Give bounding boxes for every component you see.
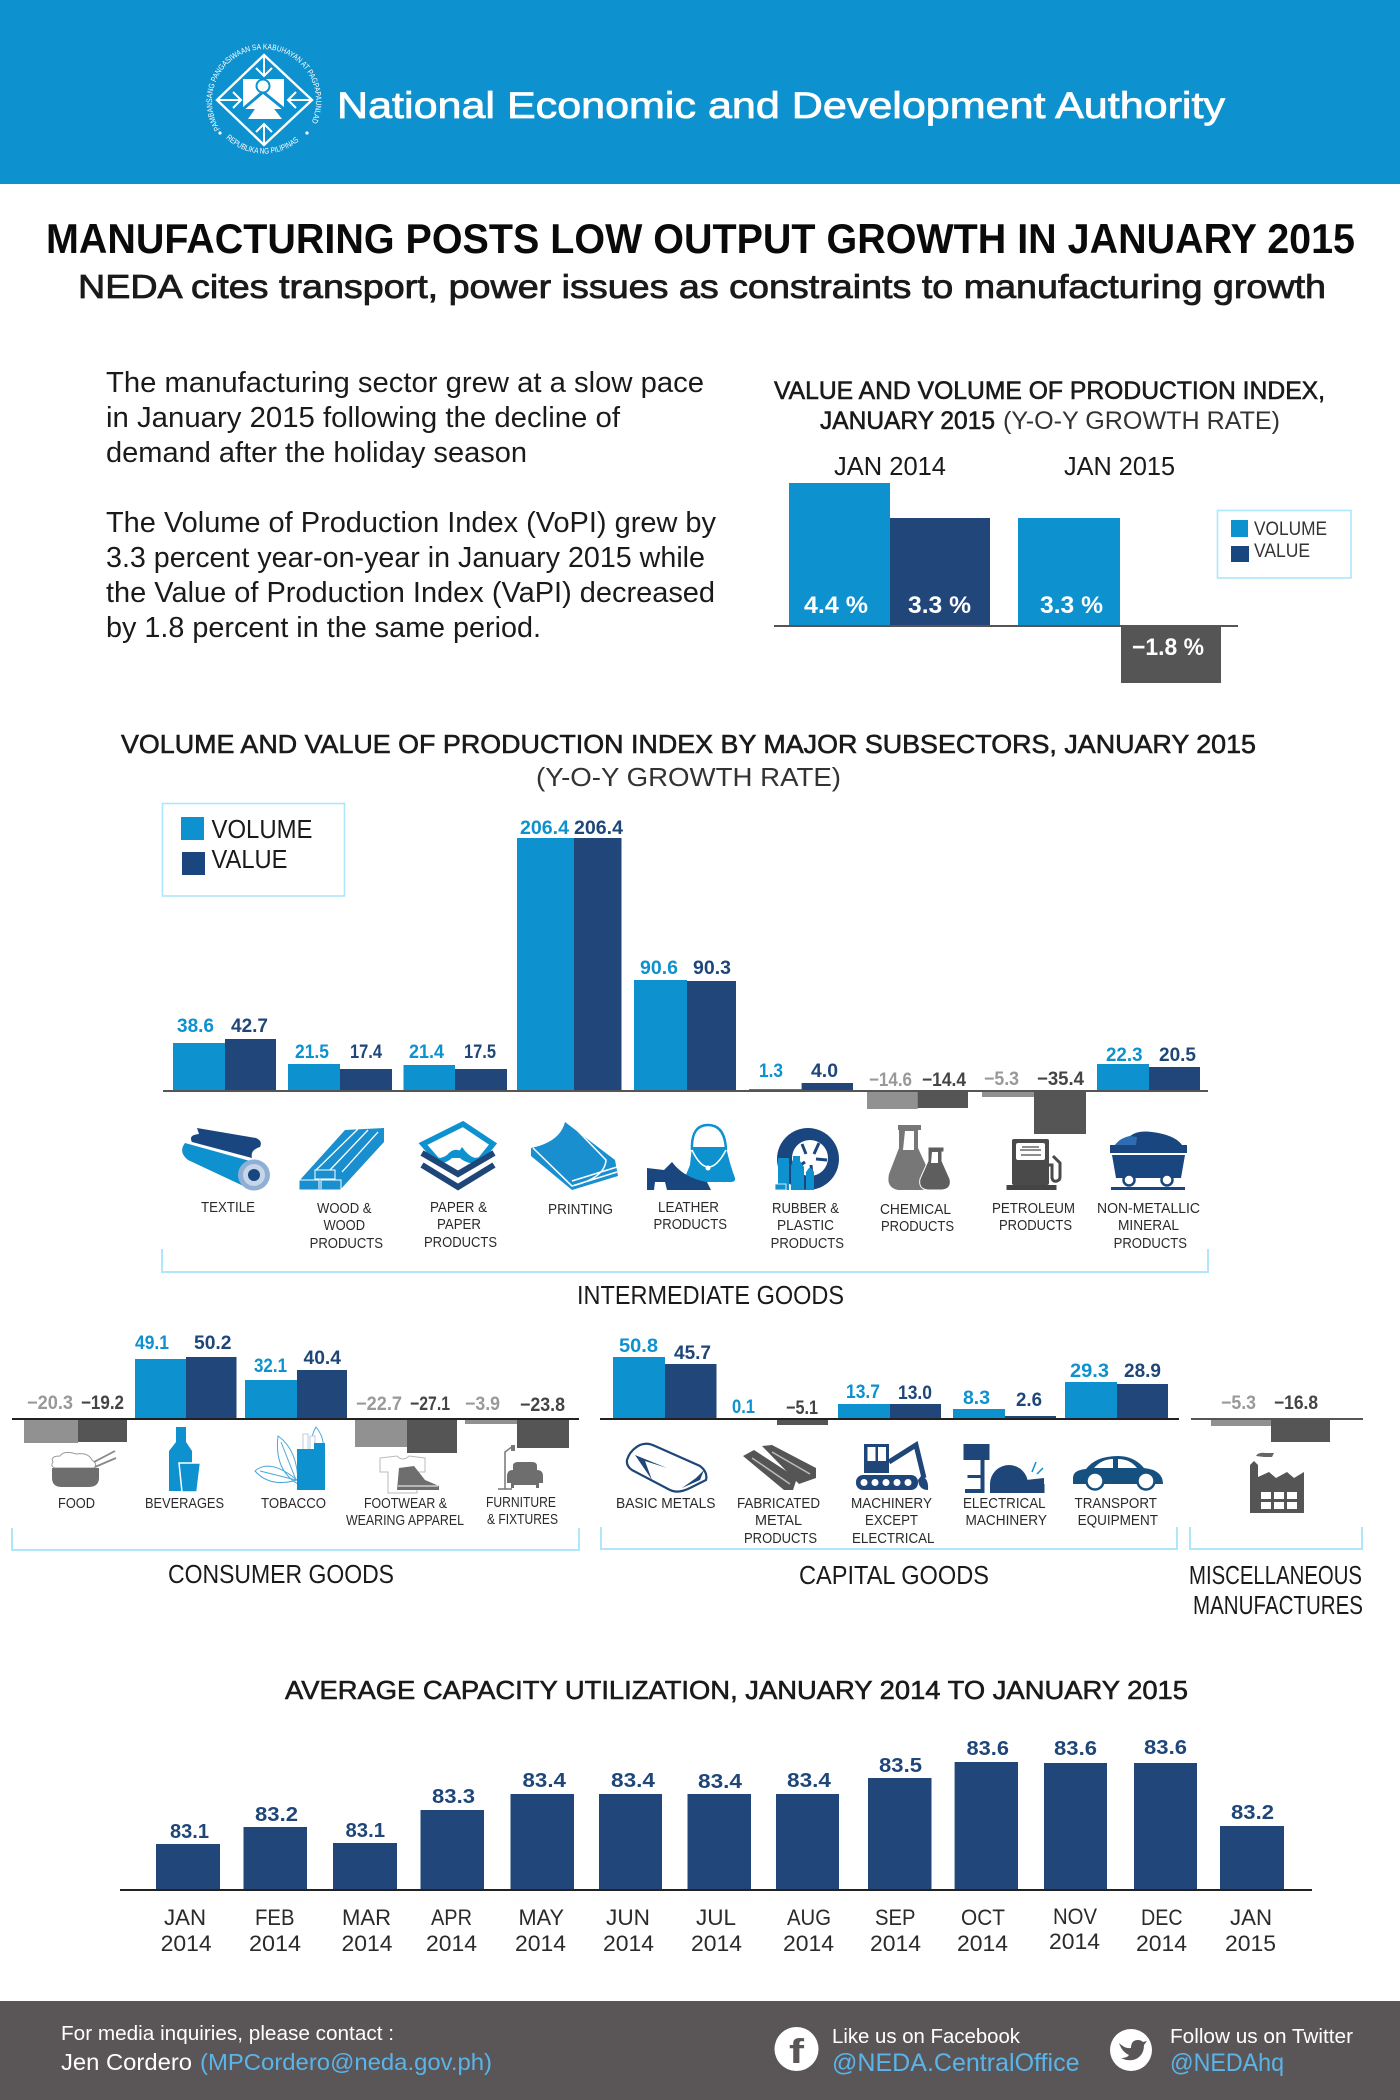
bracket: capital goods <box>601 1527 1177 1549</box>
bar chart: 3.3 % <box>1040 592 1103 619</box>
media contact: For media inquiries, please contact : <box>61 2023 394 2045</box>
icon: textile roll <box>182 1128 270 1190</box>
value labels: intermediate goods: 38.6 <box>177 1016 214 1037</box>
value labels: intermediate goods: −5.3 <box>984 1069 1019 1090</box>
subsector labels: TRANSPORT <box>1074 1495 1157 1512</box>
icon: mineral cart <box>1110 1132 1187 1190</box>
subsector labels <box>616 1495 1158 1547</box>
value labels: intermediate goods: −14.4 <box>922 1070 966 1091</box>
bar chart: intermediate goods <box>163 838 1208 1134</box>
title: MANUFACTURING POSTS LOW OUTPUT GROWTH IN JANUARY 2015 <box>46 215 1355 262</box>
group labels <box>834 451 1175 481</box>
chart heading: JANUARY 2015 <box>820 407 995 435</box>
subsector labels: PRODUCTS <box>999 1217 1072 1234</box>
subtitle: NEDA cites transport, power issues as constraints to manufacturing growth <box>78 268 1326 305</box>
subsector labels: BASIC METALS <box>616 1495 716 1512</box>
month labels: 2014 <box>603 1931 654 1956</box>
subsector labels: BEVERAGES <box>145 1495 224 1512</box>
month labels: JAN <box>164 1905 206 1930</box>
month labels: 2014 <box>783 1931 834 1956</box>
value labels: capacity utilization: 83.4 <box>522 1770 567 1792</box>
value labels: intermediate goods: 20.5 <box>1159 1045 1196 1066</box>
value labels: capital goods: 0.1 <box>732 1397 755 1418</box>
value labels: capacity utilization: 83.6 <box>966 1738 1009 1760</box>
value labels: intermediate goods: −35.4 <box>1037 1069 1084 1090</box>
subsector labels: PAPER & <box>430 1199 487 1216</box>
value labels: consumer goods: −22.7 <box>356 1394 402 1415</box>
value labels: capital goods: 8.3 <box>963 1388 990 1409</box>
bar chart: 4.4 % <box>804 592 868 619</box>
icon: paper stack <box>422 1124 494 1187</box>
value labels: capacity utilization: 83.5 <box>879 1755 922 1777</box>
subsector labels: FOOTWEAR & <box>364 1495 447 1512</box>
value labels: capital goods: 45.7 <box>674 1343 711 1364</box>
icon: facebook: f <box>789 2033 805 2071</box>
month labels: SEP <box>875 1905 916 1930</box>
value labels: consumer goods: −27.1 <box>410 1394 450 1415</box>
value labels: intermediate goods: 1.3 <box>759 1061 783 1082</box>
month labels: DEC <box>1141 1905 1183 1930</box>
value labels: intermediate goods: 90.3 <box>693 958 731 979</box>
twitter text: Follow us on Twitter <box>1170 2026 1353 2048</box>
month labels: 2014 <box>691 1931 742 1956</box>
subsector labels: RUBBER & <box>772 1200 839 1217</box>
value labels: capital goods <box>619 1336 1161 1419</box>
icon: factory <box>1250 1453 1304 1513</box>
subsector labels: NON-METALLIC <box>1097 1200 1200 1217</box>
value labels: capacity utilization: 83.4 <box>787 1770 832 1792</box>
month labels: OCT <box>961 1905 1005 1930</box>
icon: food bowl <box>52 1451 116 1487</box>
bracket: miscellaneous <box>1190 1527 1362 1549</box>
value labels: miscellaneous: −16.8 <box>1274 1393 1318 1414</box>
value labels: intermediate goods: 206.4 <box>574 818 623 839</box>
subsector labels: FABRICATED <box>737 1495 820 1512</box>
group labels: JAN 2015 <box>1064 451 1175 481</box>
month labels: AUG <box>787 1905 831 1930</box>
subsector labels: MACHINERY <box>851 1495 932 1512</box>
month labels: 2014 <box>957 1931 1008 1956</box>
subsector labels: CHEMICAL <box>880 1201 951 1218</box>
value labels: capacity utilization: 83.1 <box>346 1820 385 1842</box>
month labels: 2014 <box>870 1931 921 1956</box>
month labels: JUL <box>696 1905 736 1930</box>
bar chart: miscellaneous <box>1191 1419 1363 1442</box>
subsector labels: FURNITURE <box>486 1494 556 1511</box>
value labels: miscellaneous: −5.3 <box>1221 1393 1256 1414</box>
intro text block: 3.3 percent year-on-year in January 2015 while <box>106 542 705 574</box>
media contact <box>61 2023 492 2075</box>
subsector labels <box>201 1199 1200 1252</box>
month labels: 2014 <box>1049 1929 1100 1954</box>
value labels: consumer goods <box>27 1333 565 1416</box>
value labels: capacity utilization: 83.6 <box>1144 1737 1187 1759</box>
subsector labels: METAL <box>755 1512 802 1529</box>
subsector labels: WEARING APPAREL <box>346 1512 464 1529</box>
bar chart: capital goods <box>600 1357 1179 1425</box>
month labels <box>161 1904 1276 1956</box>
subsector labels: PETROLEUM <box>992 1200 1075 1217</box>
subsector labels: PRODUCTS <box>1114 1235 1187 1252</box>
bar chart <box>774 483 1238 683</box>
value labels: intermediate goods: 206.4 <box>520 818 569 839</box>
value labels: consumer goods: 32.1 <box>254 1356 287 1377</box>
subsector labels: & FIXTURES <box>487 1511 558 1528</box>
subsector labels: PRODUCTS <box>771 1235 844 1252</box>
subsector labels: PRODUCTS <box>744 1530 817 1547</box>
section heading: subsectors: VOLUME AND VALUE OF PRODUCTION INDEX BY MAJOR SUBSECTORS, JANUARY 2015 <box>121 729 1256 759</box>
icon: leather bag and shoe <box>647 1125 735 1190</box>
month labels: 2014 <box>249 1931 301 1956</box>
value labels: consumer goods: −3.9 <box>465 1394 500 1415</box>
month labels: 2014 <box>515 1931 566 1956</box>
value labels: intermediate goods: 17.5 <box>464 1042 496 1063</box>
subsector labels: ELECTRICAL <box>963 1495 1046 1512</box>
month labels: 2014 <box>161 1931 212 1956</box>
heading: capacity utilization: AVERAGE CAPACITY UTILIZATION, JANUARY 2014 TO JANUARY 2015 <box>285 1675 1188 1705</box>
value labels: intermediate goods: 90.6 <box>640 958 678 979</box>
value labels: capacity utilization: 83.4 <box>611 1770 656 1792</box>
legend: VOLUME <box>1254 519 1327 540</box>
subsector labels: PRODUCTS <box>654 1216 727 1233</box>
value labels: capital goods: 28.9 <box>1124 1361 1161 1382</box>
value labels: intermediate goods: 42.7 <box>231 1016 268 1037</box>
value labels: consumer goods: −23.8 <box>520 1395 565 1416</box>
subsector labels: ELECTRICAL <box>852 1530 934 1547</box>
value labels: consumer goods: −20.3 <box>27 1393 73 1414</box>
icon: chemical flasks <box>888 1125 950 1190</box>
value labels: intermediate goods: 21.5 <box>295 1042 329 1063</box>
subsector labels: PAPER <box>437 1216 481 1233</box>
icon: petroleum pump <box>1006 1139 1060 1190</box>
icon: furniture sofa and lamp <box>498 1445 543 1489</box>
bar chart: −1.8 % <box>1132 634 1204 661</box>
subsector labels: LEATHER <box>658 1199 719 1216</box>
icon: rubber tire and plastic bottles <box>775 1128 839 1190</box>
media contact: (MPCordero@neda.gov.ph) <box>200 2049 492 2075</box>
subsector labels: EXCEPT <box>865 1512 918 1529</box>
icon: electrical machinery drill and saw <box>964 1444 1044 1493</box>
subsector labels: MINERAL <box>1118 1217 1179 1234</box>
value labels: capacity utilization <box>170 1737 1274 1843</box>
facebook text: @NEDA.CentralOffice <box>832 2049 1080 2077</box>
panel: intermediate goods <box>162 818 1208 1310</box>
section heading: subsectors: (Y-O-Y GROWTH RATE) <box>536 762 841 792</box>
icon: NEDA logo: PAMBANSANG PANGASIWAAN SA KABUHAYAN AT PAGPAPAUNLAD <box>206 44 322 132</box>
intro text block: The manufacturing sector grew at a slow pace <box>106 367 704 399</box>
month labels: 2014 <box>426 1931 477 1956</box>
value labels: capital goods: 29.3 <box>1070 1361 1109 1382</box>
subsector labels: TOBACCO <box>261 1495 326 1512</box>
twitter text: @NEDAhq <box>1170 2049 1284 2077</box>
value labels: capacity utilization: 83.2 <box>1231 1802 1274 1824</box>
intro text block: demand after the holiday season <box>106 437 527 469</box>
month labels: NOV <box>1053 1904 1097 1929</box>
subsector labels: PRODUCTS <box>881 1218 954 1235</box>
value labels: capacity utilization: 83.1 <box>170 1821 209 1843</box>
bar chart: consumer goods <box>12 1357 579 1453</box>
value labels: capital goods: −5.1 <box>786 1398 818 1419</box>
icon: wood planks <box>299 1128 384 1190</box>
bar chart: 3.3 % <box>908 592 971 619</box>
month labels: JAN <box>1230 1905 1272 1930</box>
value labels: capacity utilization: 83.6 <box>1054 1738 1097 1760</box>
value labels: intermediate goods: 4.0 <box>811 1061 838 1082</box>
value labels: consumer goods: 49.1 <box>135 1333 169 1354</box>
chart heading: VALUE AND VOLUME OF PRODUCTION INDEX, <box>774 377 1325 405</box>
month labels: MAR <box>342 1905 391 1930</box>
agency name: National Economic and Development Authority <box>337 85 1226 126</box>
subsector labels: PRODUCTS <box>424 1234 497 1251</box>
subsector labels <box>58 1494 558 1529</box>
bracket: intermediate goods <box>162 1249 1208 1272</box>
footer <box>0 2001 1400 2100</box>
chart heading <box>774 377 1325 435</box>
panel: miscellaneous manufactures <box>1189 1393 1363 1620</box>
value labels: capital goods: 50.8 <box>619 1336 658 1357</box>
panel: value and volume chart <box>774 377 1351 683</box>
value labels: miscellaneous <box>1221 1393 1318 1414</box>
month labels: 2014 <box>1136 1931 1187 1956</box>
intro text block <box>106 367 717 644</box>
facebook text <box>832 2026 1080 2077</box>
value labels: consumer goods: 40.4 <box>304 1348 341 1369</box>
icon: facebook <box>774 2027 818 2071</box>
bracket: consumer goods <box>12 1528 579 1550</box>
month labels: APR <box>431 1905 472 1930</box>
value labels: intermediate goods: 21.4 <box>409 1042 444 1063</box>
section heading: subsectors <box>121 729 1256 792</box>
value labels: intermediate goods: 22.3 <box>1106 1045 1142 1066</box>
month labels: JUN <box>606 1905 650 1930</box>
intro text block: by 1.8 percent in the same period. <box>106 612 541 644</box>
icon: car <box>1073 1456 1163 1490</box>
twitter text <box>1170 2026 1353 2077</box>
subsector labels: MACHINERY <box>966 1512 1047 1529</box>
value labels: capital goods: 13.7 <box>846 1382 880 1403</box>
value labels: intermediate goods: −14.6 <box>869 1070 912 1091</box>
subsector labels: WOOD & <box>317 1200 372 1217</box>
value labels: capacity utilization: 83.3 <box>432 1786 475 1808</box>
value labels: consumer goods: −19.2 <box>81 1393 124 1414</box>
group label: consumer goods: CONSUMER GOODS <box>168 1559 394 1589</box>
icon: shirt and shoe <box>380 1456 439 1493</box>
group label: capital goods: CAPITAL GOODS <box>799 1560 989 1590</box>
intro text block: in January 2015 following the decline of <box>106 402 620 434</box>
legend: volume and value: VALUE <box>212 844 288 874</box>
value labels: intermediate goods: 17.4 <box>350 1042 382 1063</box>
group label: miscellaneous manufactures <box>1189 1560 1363 1620</box>
group label: intermediate goods: INTERMEDIATE GOODS <box>577 1280 844 1310</box>
subsector labels: EQUIPMENT <box>1078 1512 1158 1529</box>
subsector labels: PRODUCTS <box>310 1235 383 1252</box>
subsector labels: FOOD <box>58 1495 95 1512</box>
month labels: MAY <box>518 1905 564 1930</box>
icon: printing magazine <box>531 1122 618 1190</box>
panel: average capacity utilization <box>120 1675 1312 1956</box>
value labels: intermediate goods <box>177 818 1196 1091</box>
chart heading: (Y-O-Y GROWTH RATE) <box>1003 407 1280 435</box>
subsector labels: PLASTIC <box>777 1217 834 1234</box>
header banner <box>0 0 1400 184</box>
subsector labels: PRINTING <box>548 1201 613 1218</box>
icon: basic metal ingot <box>627 1444 706 1492</box>
icon: NEDA logo: REPUBLIKA NG PILIPINAS <box>226 134 298 154</box>
bar chart: capacity utilization <box>120 1762 1312 1890</box>
intro text block: the Value of Production Index (VaPI) decreased <box>106 577 715 609</box>
legend: VALUE <box>1254 541 1310 562</box>
value labels: capacity utilization: 83.2 <box>255 1804 298 1826</box>
icon: twitter <box>1110 2029 1152 2071</box>
icon: beverage bottle and cup <box>169 1427 200 1492</box>
subsector labels: TEXTILE <box>201 1199 255 1216</box>
intro text block: The Volume of Production Index (VoPI) grew by <box>106 507 717 539</box>
month labels: FEB <box>255 1905 294 1930</box>
group labels: JAN 2014 <box>834 451 946 481</box>
panel: consumer goods <box>12 1333 579 1589</box>
value labels: capital goods: 2.6 <box>1016 1390 1042 1411</box>
value labels: capacity utilization: 83.4 <box>698 1771 743 1793</box>
month labels: 2014 <box>342 1931 392 1956</box>
icon: tobacco leaves and pack <box>255 1427 325 1490</box>
media contact: Jen Cordero <box>61 2049 192 2075</box>
legend: volume and value: VOLUME <box>212 814 312 844</box>
legend: volume and value <box>162 804 344 896</box>
icon: fabricated metal beams <box>743 1445 816 1490</box>
month labels: 2015 <box>1225 1931 1276 1956</box>
value labels: consumer goods: 50.2 <box>194 1333 232 1354</box>
subsector labels: WOOD <box>324 1217 365 1234</box>
value labels: capital goods: 13.0 <box>898 1383 932 1404</box>
icon: excavator <box>856 1444 928 1490</box>
panel: capital goods <box>600 1336 1179 1590</box>
facebook text: Like us on Facebook <box>832 2026 1021 2048</box>
legend <box>1218 510 1351 578</box>
